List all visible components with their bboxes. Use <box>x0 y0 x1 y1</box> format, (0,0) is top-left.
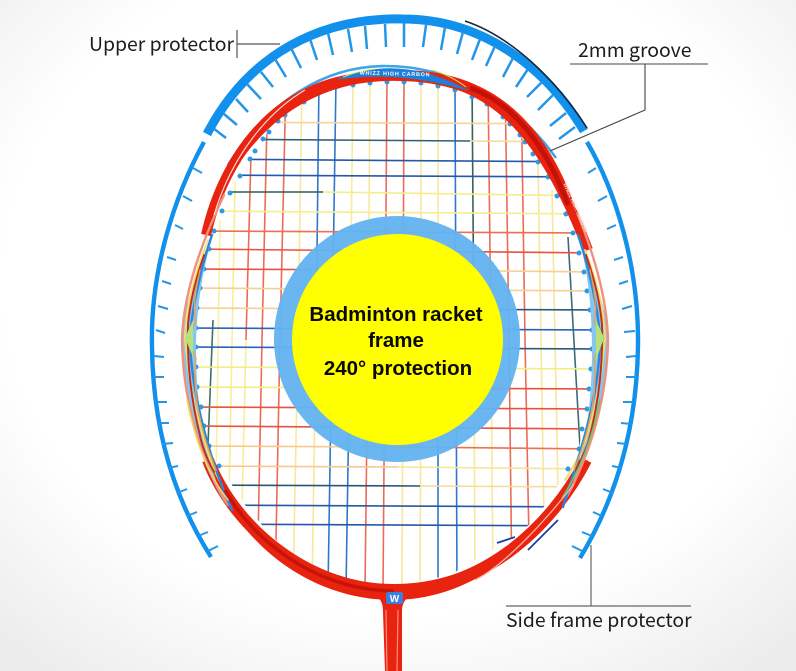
handle highlights <box>386 610 398 671</box>
racket frame <box>182 66 608 671</box>
upper protector <box>207 19 587 139</box>
thin blue outer rim <box>228 66 556 165</box>
red frame lower arc <box>205 450 590 600</box>
frame highlights <box>214 90 305 215</box>
badge text: frame <box>368 329 424 352</box>
yellow disc <box>292 234 503 445</box>
red frame upper arc <box>204 70 590 258</box>
label: upper protector: Upper protector <box>89 28 235 57</box>
left protector ticks <box>154 168 218 551</box>
left side protector <box>152 142 218 557</box>
badge text: 240° protection <box>324 357 472 380</box>
grommets <box>196 82 592 469</box>
upper protector dark edge <box>465 21 587 128</box>
leader: upper protector <box>237 30 280 58</box>
horizontal strings <box>190 122 600 526</box>
central badge <box>274 216 520 462</box>
red frame thick segments <box>206 77 588 250</box>
right protector ticks <box>572 168 637 551</box>
frame shading <box>470 88 568 205</box>
label: side frame protector <box>506 545 692 633</box>
logo badge: W <box>390 594 400 605</box>
outer dark blue strand <box>497 520 558 550</box>
label: 2mm groove <box>550 34 708 151</box>
leader: 2mm groove <box>550 64 708 151</box>
vertical strings <box>208 80 580 590</box>
upper protector band <box>207 19 584 134</box>
top blue brand band <box>338 69 467 90</box>
right protector band <box>580 142 638 558</box>
side brand text: WHIZZ HIGH CARBON <box>561 182 589 233</box>
logo badge <box>386 592 403 605</box>
blue ring <box>274 216 520 462</box>
brand text: WHIZZ HIGH CARBON <box>360 71 430 78</box>
badge text: Badminton racket <box>309 303 483 326</box>
right multicolour throat strands <box>562 215 608 507</box>
racket strings <box>190 80 600 590</box>
label: 2mm groove: 2mm groove <box>578 34 691 63</box>
handle and T-joint <box>372 592 416 671</box>
right side protector <box>572 142 638 558</box>
leader: side frame protector <box>506 545 691 606</box>
band accent lines <box>343 69 466 87</box>
left protector band <box>152 142 211 557</box>
left multicolour throat strands <box>182 195 232 510</box>
label: side frame protector: Side frame protector <box>506 604 692 633</box>
upper protector ticks <box>213 23 575 139</box>
